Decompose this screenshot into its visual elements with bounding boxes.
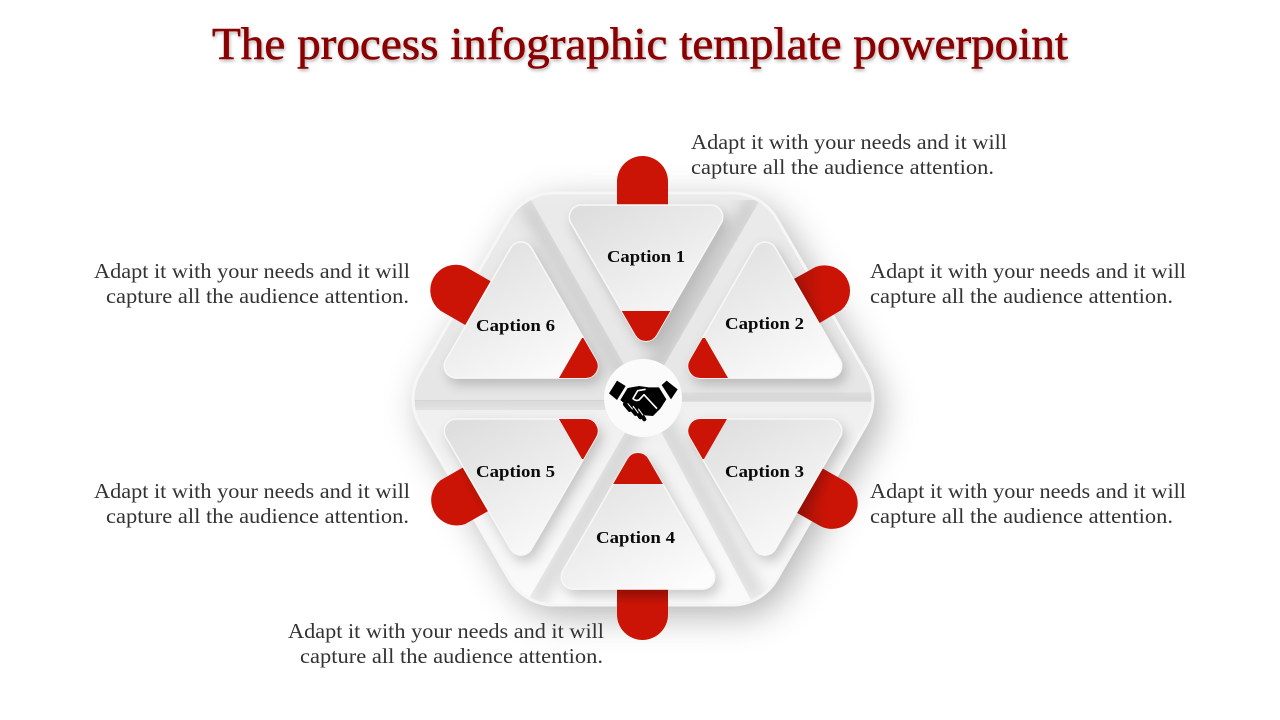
title: The process infographic template powerpoint bbox=[212, 19, 1069, 69]
text block: caption 6 bbox=[94, 259, 410, 308]
text block: caption 2 bbox=[870, 259, 1186, 308]
red tip: caption 3 bbox=[688, 419, 727, 459]
tab: top bbox=[617, 156, 668, 210]
red tip: caption 1 bbox=[622, 311, 670, 341]
text block: caption 3: Adapt it with your needs and it will bbox=[870, 479, 1186, 503]
label: caption 3: Caption 3 bbox=[725, 462, 804, 481]
text block: caption 4 bbox=[288, 619, 604, 668]
text block: caption 3: capture all the audience attention. bbox=[870, 504, 1173, 528]
tab: bottom bbox=[617, 585, 668, 640]
text block: caption 5 bbox=[94, 479, 410, 528]
text block: caption 2: capture all the audience attention. bbox=[870, 284, 1173, 308]
label: caption 6: Caption 6 bbox=[476, 316, 555, 335]
side tab: caption 5 bbox=[431, 466, 490, 526]
label: caption 5: Caption 5 bbox=[476, 462, 555, 481]
text block: caption 5: Adapt it with your needs and it will bbox=[94, 479, 410, 503]
red tip: caption 6 bbox=[559, 338, 598, 378]
panel: caption 3 bbox=[680, 419, 842, 555]
text block: caption 3 bbox=[870, 479, 1186, 528]
text block: caption 1: capture all the audience attention. bbox=[691, 155, 994, 179]
panel: caption 4 bbox=[561, 445, 715, 589]
panel: caption 6 bbox=[444, 242, 610, 378]
label: caption 1: Caption 1 bbox=[607, 247, 685, 266]
red tip: caption 4 bbox=[613, 453, 663, 484]
text block: caption 2: Adapt it with your needs and it will bbox=[870, 259, 1186, 283]
text block: caption 6: Adapt it with your needs and it will bbox=[94, 259, 410, 283]
text block: caption 4: Adapt it with your needs and it will bbox=[288, 619, 604, 643]
side tab: caption 3 bbox=[796, 468, 858, 529]
text block: caption 1 bbox=[691, 130, 1007, 179]
red tip: caption 2 bbox=[688, 338, 728, 378]
icon: handshake bbox=[609, 381, 678, 419]
side tab: caption 2 bbox=[792, 265, 850, 324]
side tab: caption 6 bbox=[430, 265, 492, 326]
text block: caption 1: Adapt it with your needs and it will bbox=[691, 130, 1007, 154]
panel: caption 5 bbox=[444, 419, 610, 555]
center circle bbox=[604, 359, 682, 437]
label: caption 2: Caption 2 bbox=[725, 314, 804, 333]
text block: caption 4: capture all the audience attention. bbox=[300, 644, 603, 668]
text block: caption 6: capture all the audience attention. bbox=[106, 284, 409, 308]
red tip: caption 5 bbox=[559, 419, 598, 459]
hexagon base bbox=[400, 185, 890, 611]
panel: caption 1 bbox=[569, 205, 723, 351]
label: caption 4: Caption 4 bbox=[596, 528, 676, 547]
text block: caption 5: capture all the audience attention. bbox=[106, 504, 409, 528]
panel: caption 2 bbox=[680, 242, 842, 378]
